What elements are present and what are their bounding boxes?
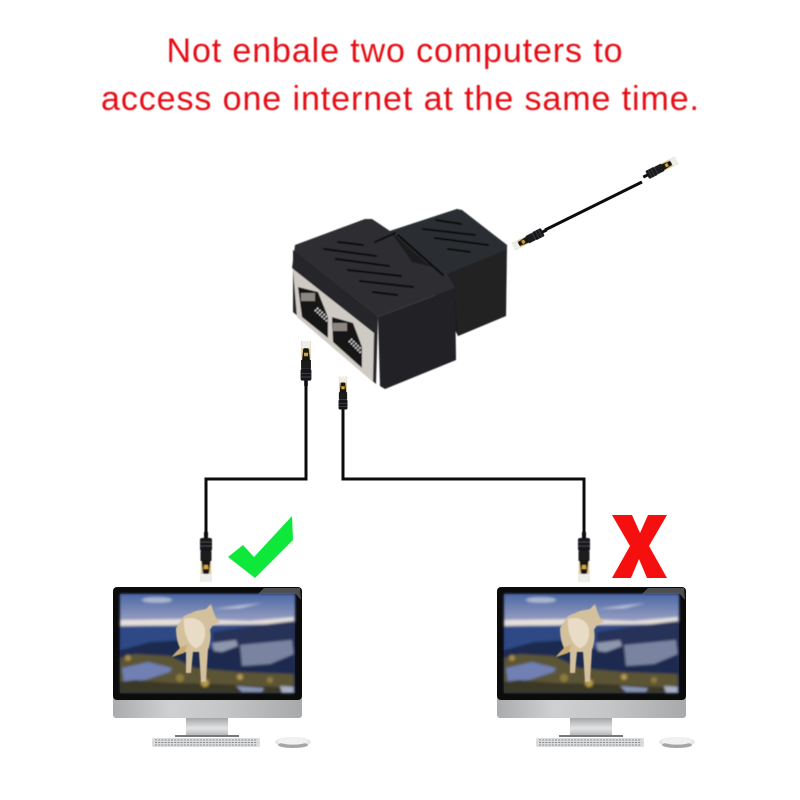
port contacts bbox=[315, 308, 361, 353]
cable: input line bbox=[545, 182, 642, 230]
icon: red X bbox=[612, 515, 667, 578]
front block top bbox=[292, 219, 455, 317]
plug: input, upper end bbox=[641, 156, 679, 181]
RJ45 adapter bbox=[292, 209, 507, 389]
right computer bbox=[497, 587, 695, 748]
plug: right branch at adapter bbox=[338, 376, 348, 414]
metal port faceplate bbox=[293, 269, 374, 382]
title: access one internet at the same time. bbox=[101, 80, 699, 118]
front block side bbox=[378, 288, 456, 389]
plug: left computer bbox=[200, 532, 212, 582]
icon: green check mark bbox=[228, 516, 293, 578]
title: Not enbale two computers to bbox=[166, 32, 622, 70]
front block lower edge bbox=[293, 250, 378, 384]
port right bbox=[332, 317, 362, 368]
cable: right computer bbox=[343, 402, 584, 536]
plug: left branch at adapter bbox=[301, 341, 311, 386]
plug: right computer bbox=[578, 532, 590, 582]
port left bbox=[298, 287, 328, 338]
title bbox=[101, 32, 699, 118]
rear block bbox=[376, 209, 507, 336]
port latches bbox=[301, 293, 315, 301]
plug: input, lower end bbox=[511, 226, 549, 251]
left computer bbox=[113, 587, 311, 748]
vents bbox=[324, 220, 488, 295]
cable: left computer bbox=[206, 376, 306, 536]
